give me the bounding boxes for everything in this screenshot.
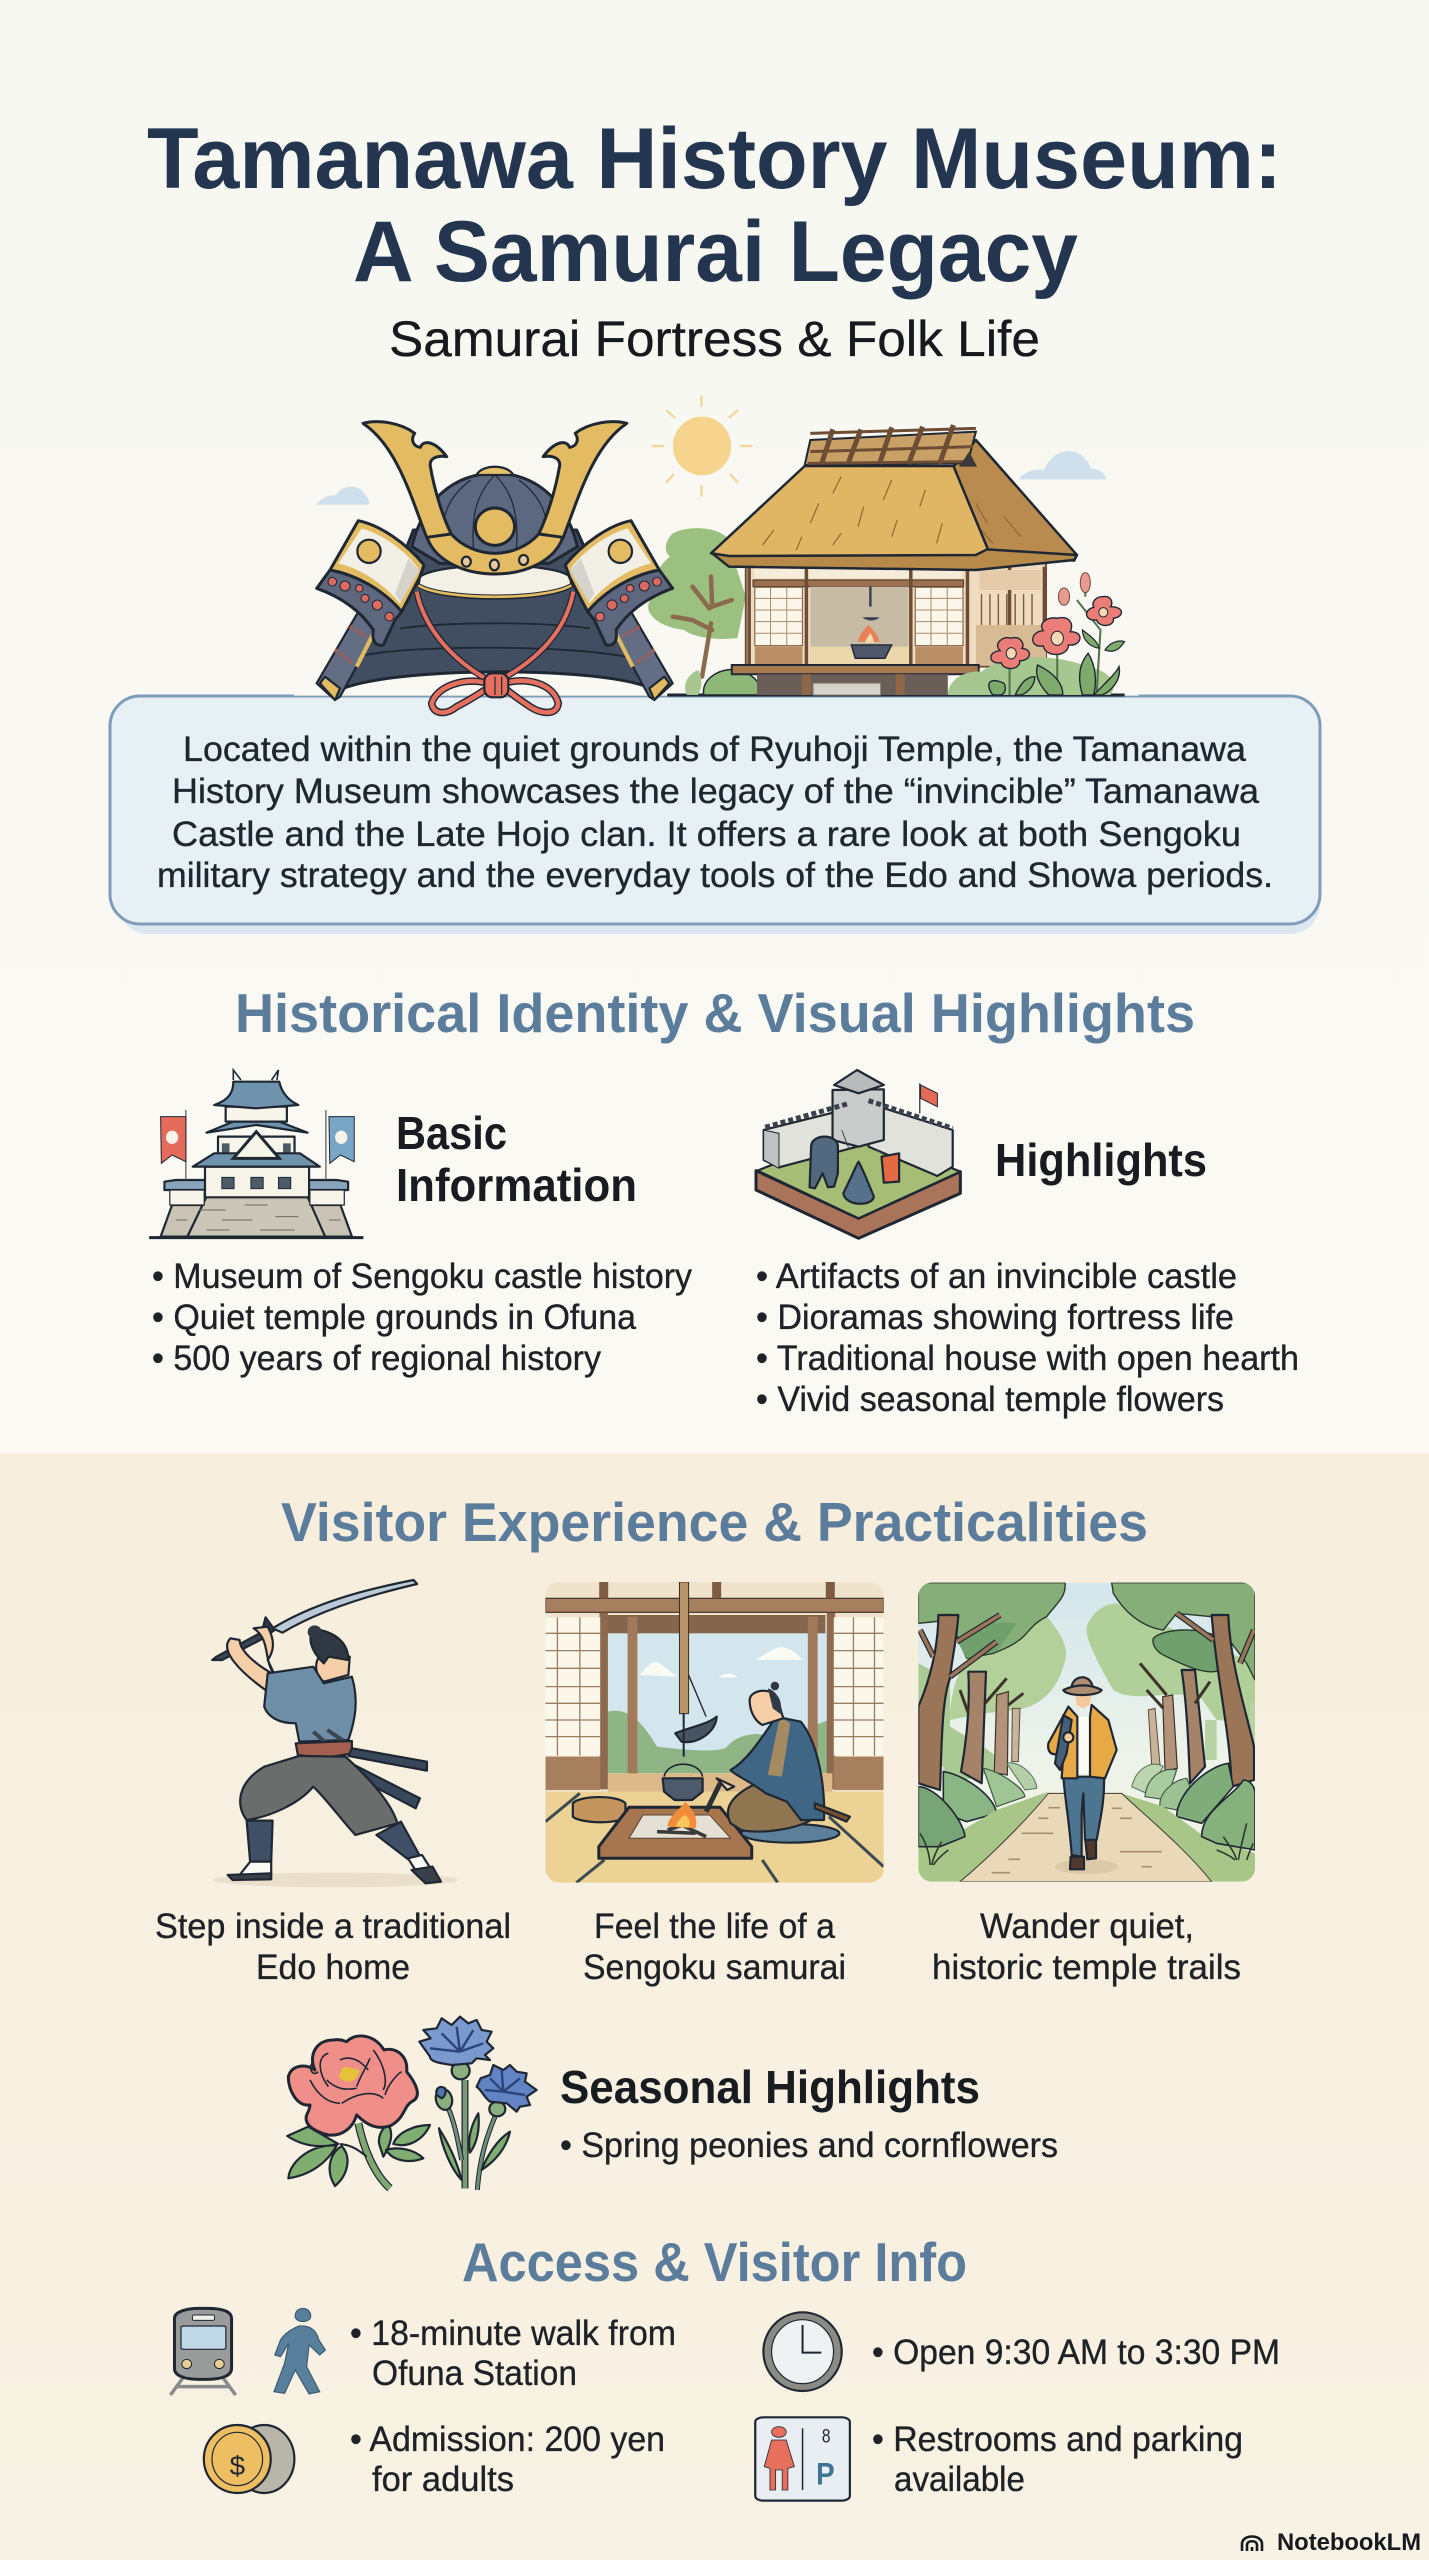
text: walk from station: Ofuna Station [372, 2354, 577, 2393]
icon: castle diorama [756, 1070, 960, 1238]
text: opening hours: • Open 9:30 AM to 3:30 PM [872, 2333, 1280, 2372]
captions for visitor experience [155, 1907, 1241, 1987]
text: admission: for adults [372, 2460, 514, 2499]
text: restrooms and parking [872, 2420, 1243, 2499]
block: seasonal highlights: • Spring peonies and cornflowers [560, 2126, 1058, 2165]
text: walk from station: • 18-minute walk from [350, 2314, 676, 2353]
list: basic information: • Quiet temple grounds in Ofuna [152, 1298, 637, 1337]
logo: NotebookLM: NotebookLM [1277, 2529, 1421, 2556]
list: basic information [152, 1257, 692, 1378]
list: highlights: • Vivid seasonal temple flowers [756, 1380, 1224, 1419]
heading: historical identity: Historical Identity & Visual Highlights [235, 982, 1195, 1044]
illustration: peony and cornflowers [287, 2017, 537, 2190]
page background: upper section [0, 0, 1429, 1453]
icon: clouds [316, 451, 1106, 505]
panel: introduction: Located within the quiet grounds of Ryuhoji Temple, the Tamanawa [183, 730, 1247, 769]
panel: introduction: military strategy and the everyday tools of the Edo and Showa periods. [157, 856, 1273, 895]
panel: introduction: Castle and the Late Hojo clan. It offers a rare look at both Sengoku [172, 815, 1241, 854]
flowers beside house [948, 573, 1125, 695]
text: admission: • Admission: 200 yen [350, 2420, 665, 2459]
captions for visitor experience: Step inside a traditional [155, 1907, 511, 1946]
icon: walking person [274, 2308, 325, 2394]
text: restrooms and parking: • Restrooms and parking [872, 2420, 1243, 2459]
list: highlights [756, 1257, 1299, 1419]
block: highlights heading: Highlights [995, 1134, 1207, 1186]
title [147, 111, 1282, 300]
list: basic information: • 500 years of regional history [152, 1339, 601, 1378]
icon: restroom and parking sign: P [816, 2457, 835, 2492]
samurai helmet [317, 422, 673, 713]
icon: clock [763, 2312, 842, 2391]
text: restrooms and parking: available [894, 2460, 1025, 2499]
icon: restroom and parking sign [755, 2417, 850, 2501]
block: basic information [396, 1107, 637, 1211]
illustration: samurai with sword [212, 1580, 458, 1887]
captions for visitor experience: Feel the life of a [594, 1907, 836, 1946]
icon: restroom and parking sign: 8 [822, 2425, 831, 2447]
illustration: samurai helmet, sun and thatched house [294, 395, 1139, 713]
page background: lower section [0, 1453, 1429, 2560]
tree [648, 528, 762, 695]
block: basic information: Basic [396, 1107, 507, 1159]
captions for visitor experience: Wander quiet, [980, 1907, 1194, 1946]
heading: access and visitor info: Access & Visitor Info [462, 2231, 967, 2293]
heading: visitor experience: Visitor Experience & Practicalities [281, 1491, 1148, 1553]
text: walk from station [350, 2314, 676, 2393]
icon: sun [652, 395, 753, 497]
list: basic information: • Museum of Sengoku castle history [152, 1257, 692, 1296]
panel: introduction: History Museum showcases the legacy of the “invincible” Tamanawa [172, 772, 1260, 811]
subtitle: Samurai Fortress & Folk Life [389, 311, 1040, 367]
captions for visitor experience: Sengoku samurai [583, 1948, 846, 1987]
title: Tamanawa History Museum: [147, 111, 1282, 207]
illustration: hearth scene [545, 1582, 884, 1883]
list: highlights: • Traditional house with open hearth [756, 1339, 1299, 1378]
list: highlights: • Artifacts of an invincible castle [756, 1257, 1237, 1296]
thatched house [711, 425, 1077, 695]
block: seasonal highlights [560, 2061, 1058, 2165]
block: seasonal highlights: Seasonal Highlights [560, 2061, 980, 2113]
title: A Samurai Legacy [353, 204, 1078, 300]
panel: introduction [110, 696, 1320, 934]
icon: coins: $ [230, 2450, 245, 2481]
captions for visitor experience: historic temple trails [932, 1948, 1241, 1987]
captions for visitor experience: Edo home [256, 1948, 410, 1987]
block: basic information: Information [396, 1159, 637, 1211]
illustration: temple trail [918, 1583, 1255, 1882]
icon: train [170, 2308, 236, 2395]
icon: castle [149, 1070, 363, 1238]
text: admission [350, 2420, 665, 2499]
list: highlights: • Dioramas showing fortress life [756, 1298, 1234, 1337]
icon: coins [204, 2425, 294, 2493]
